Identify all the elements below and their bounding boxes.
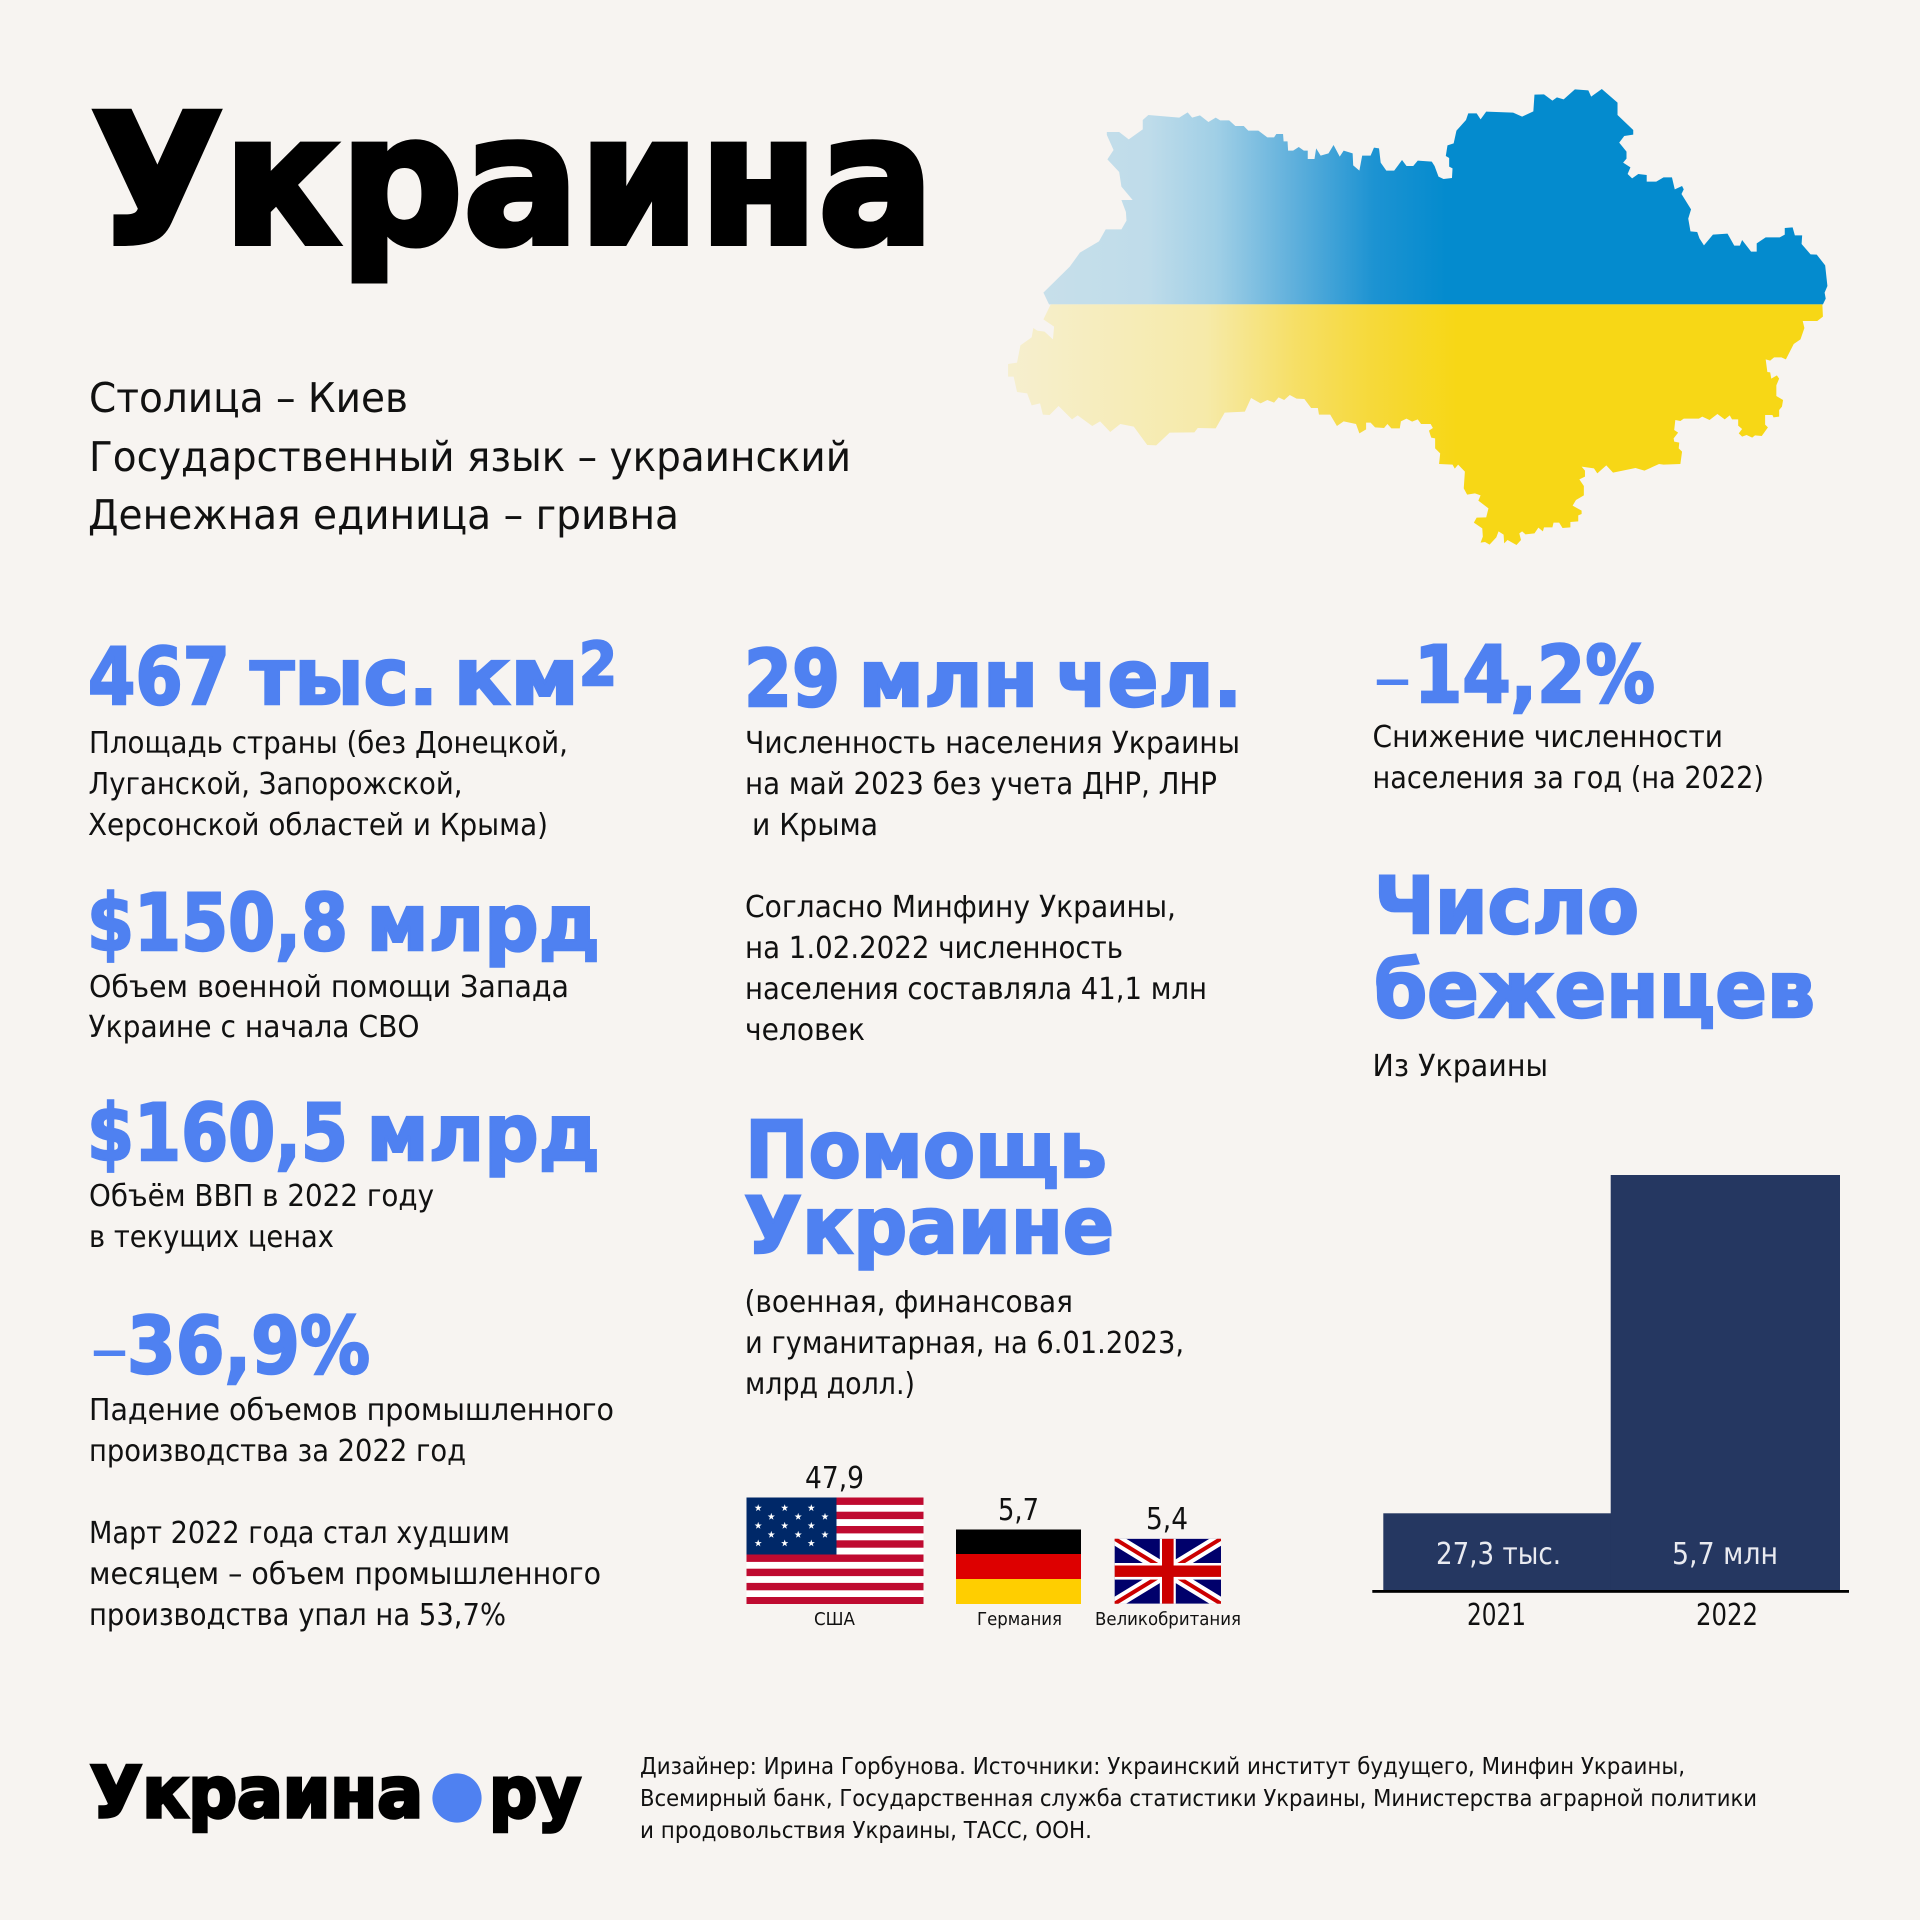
stat: population: чел. <box>1056 635 1242 725</box>
bar 2022: 5,7 млн <box>1672 1537 1778 1572</box>
Germany column: Германия <box>977 1610 1062 1630</box>
heading: aid to Ukraine: Украине <box>744 1182 1114 1272</box>
stat: population: на май 2023 без учета ДНР, ЛНР <box>745 767 1217 802</box>
USA column <box>746 1461 924 1630</box>
stat: military aid: Объем военной помощи Запада <box>89 970 569 1005</box>
stat: GDP <box>87 1089 600 1255</box>
stat: military aid: Украине с начала СВО <box>88 1010 420 1045</box>
heading: refugees: беженцев <box>1374 946 1815 1036</box>
text block: country facts: Денежная единица – гривна <box>88 491 679 539</box>
heading: refugees: Из Украины <box>1372 1049 1548 1084</box>
stat: area: Луганской, Запорожской, <box>88 767 462 802</box>
bar 2022: 2022 <box>1696 1598 1758 1633</box>
stat: population decline: – <box>1373 633 1412 723</box>
stat: GDP: млрд <box>366 1089 600 1179</box>
text block: country facts: Столица – Киев <box>89 374 408 422</box>
stat: industrial decline: производства упал на 53,7% <box>89 1598 506 1633</box>
stat: industrial decline <box>89 1302 614 1633</box>
heading: aid to Ukraine: Помощь <box>745 1106 1107 1196</box>
text block: country facts: Государственный язык – украинский <box>89 433 851 481</box>
stat: area: Херсонской областей и Крыма) <box>88 808 548 843</box>
USA column: 47,9 <box>805 1461 864 1496</box>
stat: area: км <box>454 633 579 723</box>
bar 2021 <box>1383 1513 1612 1633</box>
title: Украина <box>91 77 934 286</box>
UK column: 5,4 <box>1146 1502 1188 1537</box>
stat: population decline <box>1372 631 1764 796</box>
chart: aid by country flags <box>746 1461 1241 1630</box>
stat: population: 29 <box>744 635 840 725</box>
USA column: США <box>814 1610 855 1630</box>
heading: aid to Ukraine <box>744 1106 1184 1402</box>
stat: area <box>88 630 617 843</box>
heading: refugees <box>1372 862 1815 1084</box>
stat: industrial decline: 36,9% <box>127 1302 370 1392</box>
stat: area: тыс. <box>250 633 438 723</box>
stat: industrial decline: месяцем – объем промышленного <box>89 1557 601 1592</box>
stat: area: Площадь страны (без Донецкой, <box>89 726 568 761</box>
source credits: Всемирный банк, Государственная служба статистики Украины, Министерства аграрной политики <box>640 1786 1757 1812</box>
stat: GDP: $160,5 <box>87 1089 348 1179</box>
stat: population: Численность населения Украины <box>745 726 1240 761</box>
bar 2021: 27,3 тыс. <box>1436 1537 1561 1572</box>
map: Ukraine flag silhouette <box>1008 89 1827 545</box>
stat: industrial decline: – <box>90 1304 129 1394</box>
UK column: Великобритания <box>1095 1610 1241 1630</box>
heading: aid to Ukraine: и гуманитарная, на 6.01.2023, <box>745 1326 1184 1361</box>
stat: military aid: млрд <box>366 879 600 969</box>
stat: area: 2 <box>579 630 617 700</box>
source credits <box>640 1754 1757 1844</box>
Germany column: 5,7 <box>998 1493 1039 1528</box>
stat: population <box>744 635 1242 1048</box>
stat: population decline: 14,2% <box>1414 631 1655 721</box>
UK column <box>1095 1502 1241 1630</box>
stat: population: человек <box>745 1013 865 1048</box>
stat: population: и Крыма <box>752 808 878 843</box>
stat: GDP: Объём ВВП в 2022 году <box>89 1179 434 1214</box>
logo: Украина.ру: Украина <box>90 1752 423 1834</box>
stat: GDP: в текущих ценах <box>89 1220 334 1255</box>
stat: area: 467 <box>88 633 230 723</box>
source credits: Дизайнер: Ирина Горбунова. Источники: Украинский институт будущего, Минфин Украины, <box>640 1754 1685 1780</box>
stat: population: на 1.02.2022 численность <box>745 931 1123 966</box>
Germany column <box>956 1493 1081 1630</box>
heading: refugees: Число <box>1374 862 1639 952</box>
stat: industrial decline: производства за 2022 год <box>89 1434 466 1469</box>
source credits: и продовольствия Украины, ТАСС, ООН. <box>640 1818 1092 1844</box>
bar chart: refugees 2021-2022 <box>1372 1175 1849 1633</box>
stat: military aid: $150,8 <box>87 879 348 969</box>
bar 2022 <box>1611 1175 1840 1633</box>
stat: population decline: Снижение численности <box>1372 720 1723 755</box>
logo: Украина.ру <box>90 1752 581 1834</box>
stat: population decline: населения за год (на 2022) <box>1372 761 1764 796</box>
stat: industrial decline: Март 2022 года стал худшим <box>89 1516 510 1551</box>
stat: population: Согласно Минфину Украины, <box>745 890 1176 925</box>
logo: Украина.ру: ру <box>489 1752 581 1834</box>
text block: country facts <box>88 374 851 539</box>
heading: aid to Ukraine: млрд долл.) <box>745 1367 915 1402</box>
bar 2021: 2021 <box>1467 1598 1526 1633</box>
stat: population: млн <box>858 635 1038 725</box>
stat: population: населения составляла 41,1 млн <box>745 972 1207 1007</box>
heading: aid to Ukraine: (военная, финансовая <box>744 1285 1073 1320</box>
stat: military aid <box>87 879 600 1045</box>
stat: industrial decline: Падение объемов промышленного <box>89 1393 614 1428</box>
